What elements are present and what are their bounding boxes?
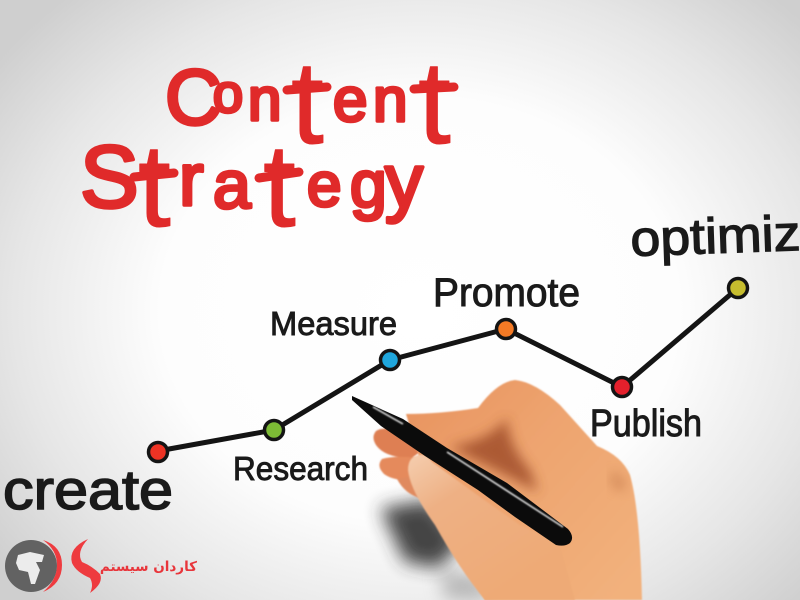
- hand shadow: [380, 500, 462, 568]
- title line: Content: e: [333, 66, 367, 135]
- title line: Content: n: [373, 66, 407, 135]
- title letter crossbars: [134, 87, 454, 178]
- node: optimize: [728, 278, 748, 298]
- logo globe: [5, 540, 57, 592]
- title line: Content: n: [248, 66, 281, 133]
- node: publish: [612, 378, 632, 396]
- hand shadow lower: [440, 570, 495, 600]
- label: Research: Research: [233, 450, 368, 487]
- title line: Content: o: [213, 64, 243, 124]
- node: research: [264, 420, 284, 440]
- title line: Content: t: [418, 37, 451, 169]
- title line: Content: C: [165, 53, 221, 141]
- logo: Kardan System: [5, 539, 197, 593]
- node: promote: [496, 320, 516, 338]
- title line: Strategy: g: [350, 147, 387, 221]
- title line: Strategy: r: [179, 138, 204, 221]
- title line: Strategy: a: [213, 147, 251, 223]
- title line: Strategy: t: [263, 120, 296, 252]
- logo swoosh: [71, 539, 101, 593]
- logo continents: [16, 552, 44, 584]
- knuckle shading: [612, 470, 625, 492]
- pen body: [352, 396, 572, 546]
- hand holding pen: [352, 380, 642, 600]
- node: create: [148, 442, 168, 462]
- logo crescent: [43, 540, 62, 592]
- node: measure: [380, 350, 400, 370]
- title line: Strategy: e: [307, 151, 341, 220]
- title: Content Strategy: [80, 37, 451, 252]
- title line: Strategy: t: [138, 120, 171, 252]
- title line: Strategy: S: [80, 127, 139, 226]
- label: Measure: Measure: [270, 305, 397, 342]
- label: create: create: [3, 458, 173, 521]
- label: Promote: Promote: [433, 271, 580, 315]
- pen highlight: [373, 407, 563, 527]
- palm and index finger: [406, 380, 642, 600]
- logo text: کاردان سیستم: [100, 559, 197, 575]
- trend line: [158, 288, 738, 451]
- title line: Strategy: y: [385, 139, 423, 224]
- thumb: [408, 455, 575, 600]
- line chart: content steps: [148, 278, 748, 462]
- label: optimiz: optimiz: [629, 205, 800, 267]
- pen: [352, 396, 572, 546]
- title line: Content: t: [291, 37, 324, 169]
- lower fingers: [374, 428, 425, 498]
- finger crease shading: [450, 418, 538, 492]
- label: Publish: Publish: [590, 403, 702, 445]
